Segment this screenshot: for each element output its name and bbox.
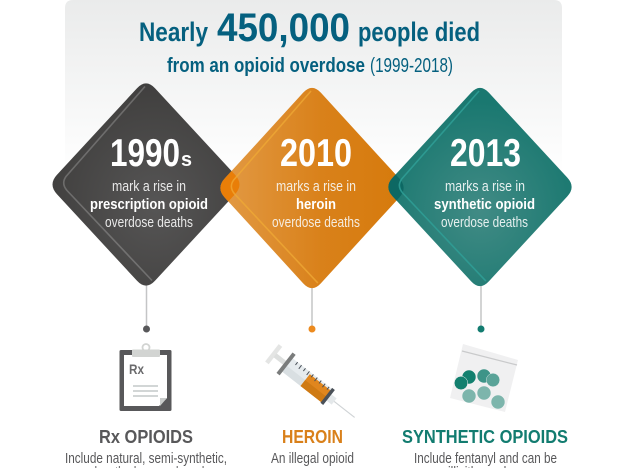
column: synthetic opioids: Include fentanyl and can be xyxy=(414,450,557,467)
diamond: 2013: synthetic opioid xyxy=(434,197,535,213)
diamond: 2013: 2013 xyxy=(450,132,521,175)
diamond: 2010: marks a rise in xyxy=(276,179,356,195)
diamond: 1990s: 1990 xyxy=(110,132,180,175)
title xyxy=(139,6,480,77)
diamond: 2013: marks a rise in xyxy=(445,179,525,195)
connector: 1990s xyxy=(143,285,150,332)
column: synthetic opioids xyxy=(402,427,568,468)
icon: bag of pills xyxy=(450,344,518,412)
connector: 2013 xyxy=(478,286,484,332)
diamond: 2010: 2010 xyxy=(280,132,352,175)
title: Nearly xyxy=(139,17,208,47)
title: from an opioid overdose xyxy=(167,54,365,77)
connector: 2010 xyxy=(308,288,316,332)
diamond: 2013 xyxy=(388,88,572,286)
column: heroin: An illegal opioid xyxy=(271,450,354,467)
column: synthetic opioids: SYNTHETIC OPIOIDS xyxy=(402,427,568,447)
title: (1999-2018) xyxy=(370,54,453,77)
column: Rx opioids xyxy=(65,427,227,468)
diamond: 2013: overdose deaths xyxy=(441,215,528,231)
diamond: 2010: overdose deaths xyxy=(272,215,360,231)
panel: header background xyxy=(65,0,562,175)
column: Rx opioids: Include natural, semi-synthetic, xyxy=(65,450,227,467)
diamond: 1990s: overdose deaths xyxy=(105,215,193,231)
diamond: 2010: heroin xyxy=(296,197,336,213)
title: people died xyxy=(358,17,480,47)
diamond: 1990s xyxy=(52,83,240,286)
column: heroin xyxy=(271,427,354,467)
column: heroin: HEROIN xyxy=(282,427,343,447)
diamond: 2010 xyxy=(215,88,404,288)
diamond: 1990s: s xyxy=(181,149,192,171)
diamond: 1990s: mark a rise in xyxy=(112,179,186,195)
icon: clipboard: Rx xyxy=(129,361,144,377)
icon: syringe xyxy=(264,343,363,428)
column: Rx opioids: Rx OPIOIDS xyxy=(99,427,193,447)
title: 450,000 xyxy=(217,6,350,50)
icon: clipboard xyxy=(120,344,172,411)
diamond: 1990s: prescription opioid xyxy=(90,197,208,213)
